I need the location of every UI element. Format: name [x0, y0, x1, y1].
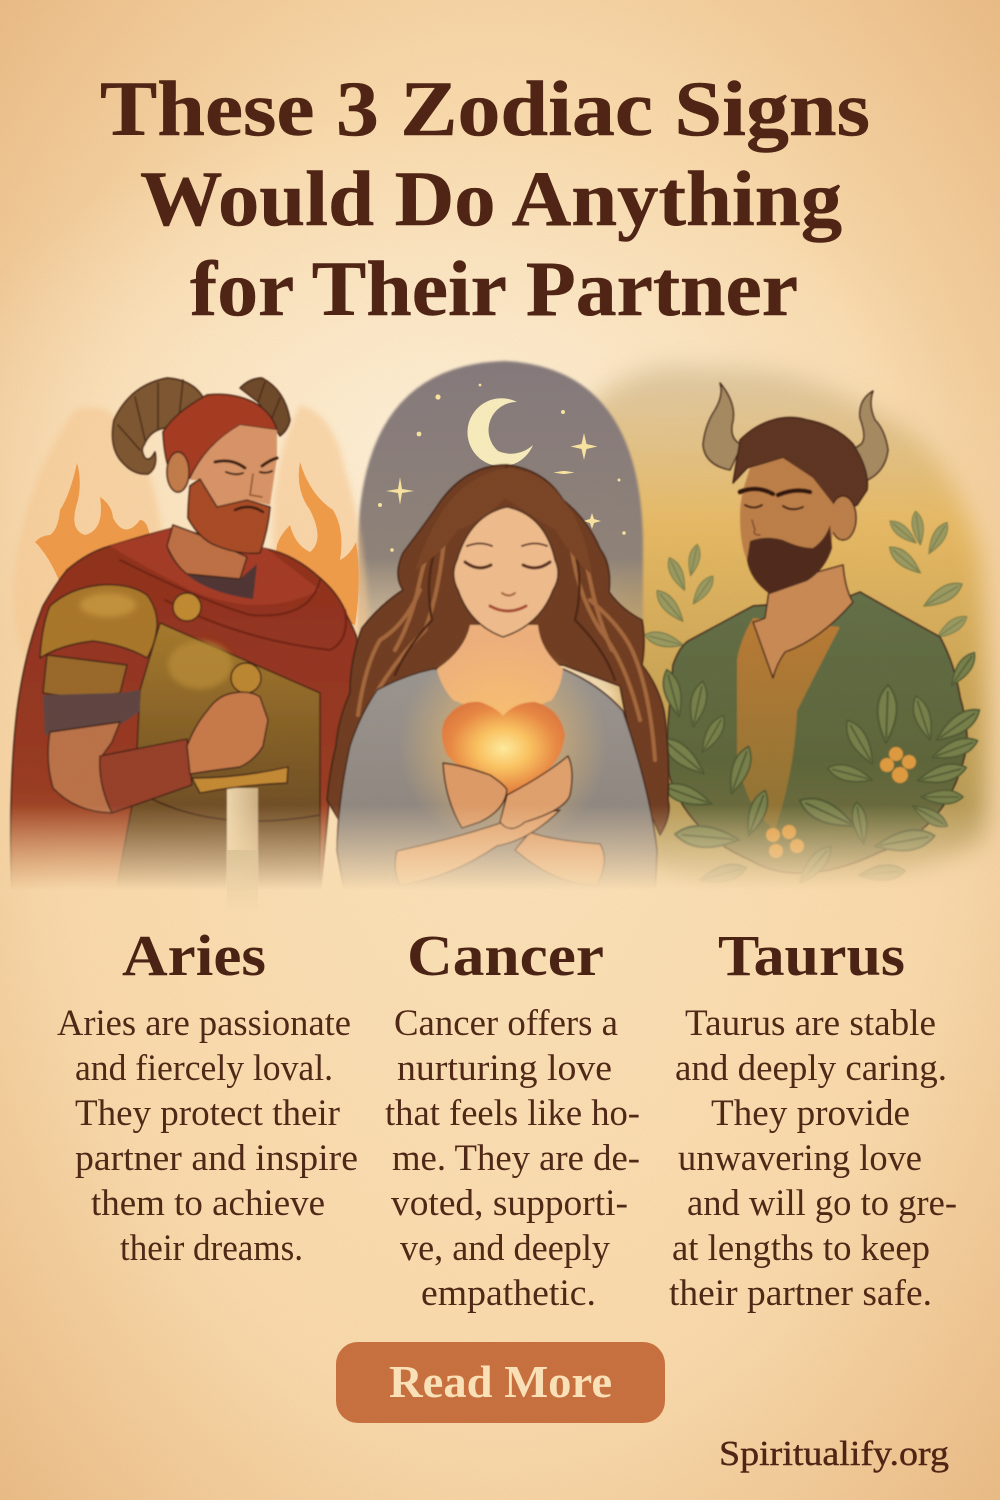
text: Taurus description: and deeply caring. [675, 1048, 947, 1089]
neck and chest [437, 625, 563, 720]
icon: crescent moon [467, 398, 533, 466]
footer: site name: Spiritualify.org [719, 1434, 949, 1473]
text: Cancer description: nurturing love [397, 1048, 612, 1089]
ear [167, 452, 189, 492]
brooch [173, 593, 201, 621]
chest armour [115, 623, 320, 895]
tunic [665, 592, 967, 873]
Aries flames [14, 404, 370, 654]
illustration: three zodiac figures [11, 361, 988, 910]
bracer [100, 739, 192, 813]
text: Taurus description: Taurus are stable [685, 1003, 936, 1044]
Cancer arch and night sky [358, 361, 643, 690]
column: Cancer [385, 923, 640, 1314]
text: Aries description: partner and inspire [75, 1138, 358, 1179]
heading: Cancer: Cancer [407, 923, 604, 988]
undershirt [737, 618, 840, 830]
text: Cancer description [385, 1003, 640, 1314]
text: Taurus description [669, 1003, 957, 1314]
collar [167, 549, 257, 599]
heading: Taurus: Taurus [718, 923, 905, 988]
text: Cancer description: empathetic. [421, 1273, 596, 1314]
sleeve [43, 690, 140, 735]
face [454, 507, 558, 637]
text: Aries description: their dreams. [120, 1228, 303, 1269]
pauldron [43, 655, 127, 696]
text: Cancer description: that feels like ho- [385, 1093, 640, 1134]
text: Taurus description: unwavering love [678, 1138, 922, 1179]
title: Would Do Anything [140, 155, 842, 242]
sword tip fading out [227, 850, 258, 910]
text: Aries description: them to achieve [91, 1183, 325, 1224]
lower leaves [657, 649, 984, 888]
Taurus figure [643, 383, 984, 888]
Cancer figure [327, 465, 669, 895]
text: Cancer description: me. They are de- [392, 1138, 640, 1179]
text: Aries description: and fiercely loval. [75, 1048, 333, 1089]
text: Aries description [57, 1003, 358, 1269]
cape drape [110, 528, 320, 605]
icon: stars [378, 384, 626, 552]
cape [11, 528, 363, 895]
neck [167, 525, 247, 579]
face [739, 457, 834, 560]
horns [703, 383, 742, 470]
title: These 3 Zodiac Signs [100, 65, 870, 152]
button: Read More [336, 1342, 665, 1423]
beard [747, 525, 832, 594]
horns [112, 378, 207, 474]
flowers [766, 747, 916, 858]
arms and hands [395, 756, 604, 885]
hand [187, 692, 268, 774]
face details [740, 489, 810, 535]
dress [337, 669, 657, 895]
column: Aries [57, 923, 358, 1269]
hair front [415, 468, 592, 575]
neck [753, 565, 853, 678]
icon: sword [192, 663, 288, 910]
heading: Aries: Aries [122, 923, 266, 988]
text: Aries description: Aries are passionate [57, 1003, 351, 1044]
face details [215, 458, 277, 512]
text: Aries description: They protect their [75, 1093, 340, 1134]
text: Taurus description: their partner safe. [669, 1273, 932, 1314]
Taurus backdrop [585, 366, 988, 896]
ear [830, 496, 856, 540]
heart [442, 702, 565, 795]
Aries figure [11, 378, 363, 910]
column: Taurus [669, 923, 957, 1314]
face [190, 425, 277, 507]
upper leaves [643, 510, 970, 651]
text: Cancer description: Cancer offers a [394, 1003, 618, 1044]
text: Taurus description: They provide [711, 1093, 910, 1134]
arm [48, 722, 120, 813]
hair [163, 394, 277, 480]
heart glow [398, 640, 608, 850]
text: Taurus description: at lengths to keep [672, 1228, 930, 1269]
text: Cancer description: voted, supporti- [391, 1183, 628, 1224]
hair [733, 418, 867, 515]
text: Taurus description: and will go to gre- [687, 1183, 957, 1224]
face details [465, 544, 550, 611]
hair [327, 465, 669, 835]
title: for Their Partner [190, 245, 798, 332]
title [100, 65, 870, 332]
beard [188, 479, 270, 553]
button: Read More: Read More [389, 1356, 612, 1407]
text: Cancer description: ve, and deeply [400, 1228, 610, 1269]
